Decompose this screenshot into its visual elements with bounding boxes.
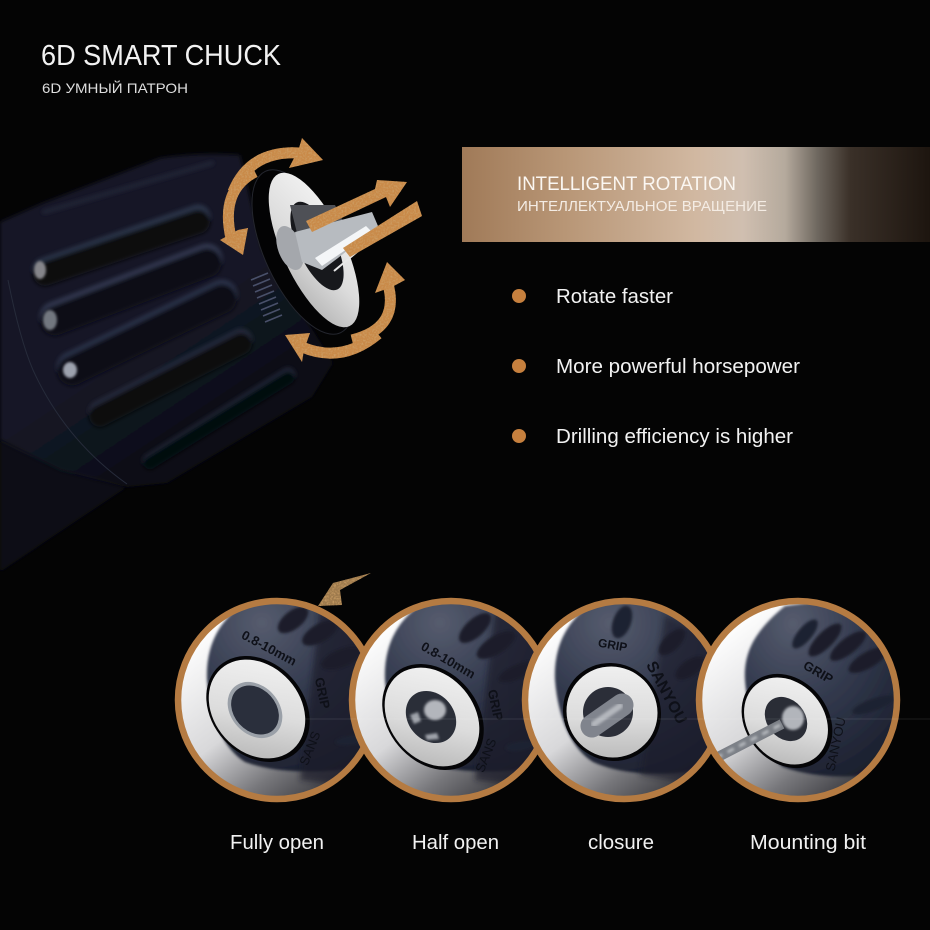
hole [406,691,456,743]
caption: mounting bit: Mounting bit [750,832,866,854]
head [375,262,405,293]
curved arrow top [233,138,323,192]
head [220,228,248,255]
groove 3 rim [72,295,222,367]
circle photo [716,590,905,786]
shaft [233,153,300,192]
brand text: SANYOU [823,716,849,772]
collar [723,656,851,786]
feature 3 text: Drilling efficiency is higher [556,426,793,448]
groove 4 [100,344,241,416]
shaft [302,334,378,353]
bit highlight [594,706,620,724]
circle rim [352,601,550,799]
rotation arrows [220,138,422,362]
grip recess 2 [300,621,337,647]
bit highlight [315,226,372,266]
circle rim [699,601,897,799]
silver ring [727,661,845,781]
grip recess 1 [276,606,310,634]
brand text: SANS [296,729,324,768]
banner subtitle: ИНТЕЛЛЕКТУАЛЬНОЕ ВРАЩЕНИЕ [517,199,767,215]
circle background [525,601,723,799]
jaw glints [410,712,439,740]
groove end highlights [34,261,77,378]
silver disk [250,161,378,339]
groove top [44,163,212,212]
chuck size text: 0.8-10mm [419,639,478,682]
grip recess 4 [845,642,891,678]
grip recess 2 [476,632,514,660]
grip recess 2 [658,629,685,656]
bit tip [424,700,446,720]
curved arrow left [220,172,255,255]
screwdriver bit [592,705,622,726]
curved arrow right [352,262,405,340]
grip text: GRIP [485,688,506,722]
chuck body [0,154,333,487]
caption: half open: Half open [412,832,499,854]
curved arrow bottom [285,333,378,362]
hole [231,686,279,734]
feature 2 text: More powerful horsepower [556,356,800,378]
shaft [228,172,255,238]
circle photo [552,604,708,782]
bit outline [334,232,381,271]
chuck [745,590,905,777]
head [289,138,323,168]
chuck size text: 0.8-10mm [239,627,299,669]
bullet 1 [512,289,526,303]
panel: half open [348,598,538,802]
silver ring [208,660,306,758]
bullet 2 [512,359,526,373]
drill rear housing [0,440,127,572]
hole rim [228,682,282,738]
groove 3 [72,299,222,371]
circle photo [382,604,534,785]
bit shank [782,706,804,730]
grip recess 4 [334,733,370,747]
groove 2 [55,263,207,321]
bit cone [290,205,345,245]
bullet 3 [512,429,526,443]
grip recess 1 [610,604,634,640]
straight arrow band [343,201,422,257]
banner title: INTELLIGENT ROTATION [517,173,736,195]
chuck [552,604,708,775]
grip recess 1 [458,612,492,644]
grip text: GRIP [801,658,836,687]
pointer arrow [318,573,371,606]
chuck hole [279,194,355,298]
chuck [382,604,534,773]
panel: fully open [174,598,364,802]
caption: closure: closure [588,832,654,854]
panel: closure [522,598,711,802]
banner bar [462,147,930,242]
highlight 1 [34,261,46,279]
chuck grooves [44,163,288,463]
hole [756,688,816,750]
right shade [638,614,707,782]
collar [382,664,484,770]
highlight 2 [43,310,57,330]
title: 6D SMART CHUCK [41,40,282,72]
grip recess 3 [826,626,870,666]
threaded black collar [231,155,375,349]
drill bit [295,212,378,270]
grip text: GRIP [312,676,333,710]
brand text: SANS [472,736,500,775]
hole [583,687,633,737]
subtitle: 6D УМНЫЙ ПАТРОН [42,79,188,96]
brand text: SANYOU [642,659,690,727]
groove 4 rim [100,340,241,412]
grip recess 1 [788,616,822,652]
groove 5 [150,378,288,463]
straight arrow up [306,180,407,232]
groove 5 rim [150,375,288,461]
bit flutes [716,724,782,758]
caption: fully open: Fully open [230,832,324,854]
bit collar [271,222,309,274]
grip recess 2 [804,619,846,661]
circle photo [204,604,360,786]
grip text: GRIP [597,636,628,655]
collar [206,656,310,762]
right shade [472,614,534,785]
silver ring [384,668,480,766]
feature 1 text: Rotate faster [556,286,673,308]
circle background [699,601,897,799]
panel: mounting bit [699,590,905,799]
feature list [512,286,800,448]
circle background [178,601,376,799]
grip recess 3 [500,664,522,681]
grip recess 5 [850,692,896,718]
groove 1 rim [45,217,198,270]
groove 1 [45,222,198,274]
knurled neck [251,273,282,322]
circle background [352,601,550,799]
collar [543,643,681,781]
heading banner [462,147,930,242]
grip recess 3 [322,649,351,668]
silver ring [548,648,676,776]
groove 2 rim [55,259,207,317]
right shade [297,614,357,786]
circle rim [525,601,723,799]
highlight 3 [63,362,77,378]
drill bit [716,724,782,758]
drill illustration [0,154,381,572]
grip recess 4 [504,739,536,753]
chuck [204,604,360,773]
chuck seam line [8,280,127,484]
circle rim [178,601,376,799]
grip recess 3 [676,657,704,679]
shaft [352,284,390,340]
head [285,333,310,362]
